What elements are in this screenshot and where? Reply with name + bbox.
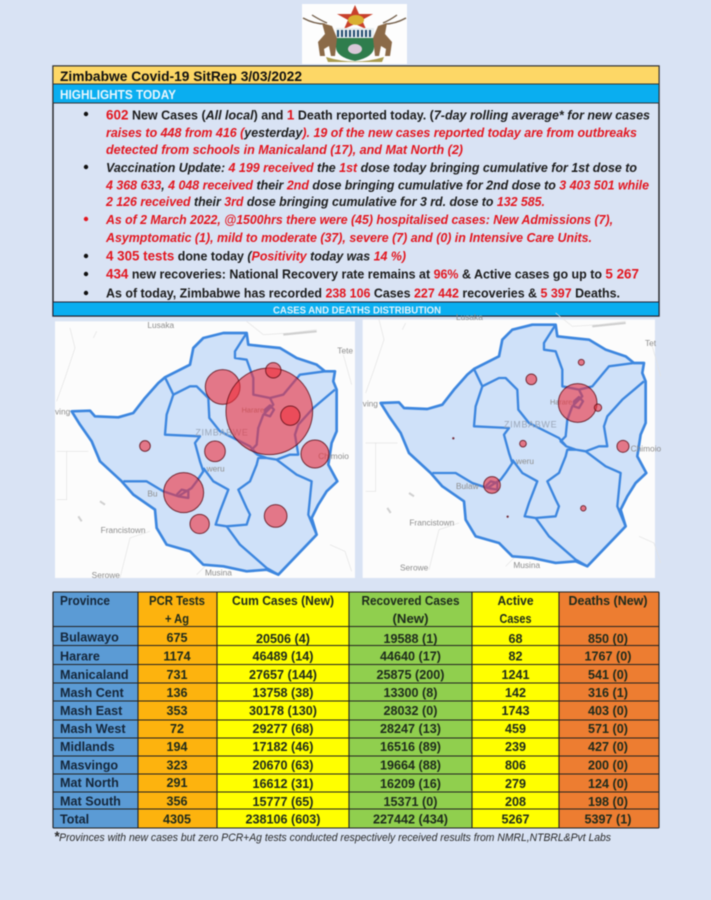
row: Manicaland: 27657 (144) <box>249 668 317 682</box>
bullet list: detected from schools in Manicaland (17), and Mat North (2) <box>106 142 463 157</box>
table header: Province <box>60 594 110 608</box>
case bubbles <box>140 363 329 534</box>
table header: Active <box>498 593 534 608</box>
crest star <box>337 5 373 29</box>
row: Mash West: 72 <box>170 722 184 736</box>
row: Harare: Harare <box>60 650 100 664</box>
row: Mash Cent: 13300 (8) <box>384 686 437 700</box>
icon: Zimbabwe coat of arms <box>302 4 407 64</box>
map place labels: Bulaw <box>456 481 480 491</box>
row: Harare: 1767 (0) <box>585 650 631 664</box>
row: Manicaland: 541 (0) <box>588 668 628 682</box>
map place labels: Serowe <box>400 562 429 572</box>
row: Manicaland: 731 <box>166 668 188 682</box>
bullet list: 602 New Cases (All local) and 1 Death reported today. (7-day rolling average* for new cases <box>106 106 650 122</box>
row: Masvingo: 19664 (88) <box>380 758 441 772</box>
map place labels: weru <box>515 456 534 466</box>
row: Mash Cent: 316 (1) <box>588 686 628 700</box>
title bar <box>53 66 659 84</box>
crest base <box>326 57 384 62</box>
row: Mat South: 198 (0) <box>588 795 628 809</box>
row: Mat North: 279 <box>505 777 526 791</box>
left kudu <box>303 15 337 56</box>
row: Bulawayo: 19588 (1) <box>384 632 437 646</box>
highlights heading bar <box>53 84 659 103</box>
column fills <box>53 592 659 828</box>
row: Midlands: 427 (0) <box>588 740 628 754</box>
row: Total: 5397 (1) <box>585 812 631 826</box>
map place labels: Francistown <box>101 525 146 535</box>
row: Total: 4305 <box>163 812 191 826</box>
row: Manicaland <box>60 668 628 682</box>
row: Mat South: 208 <box>505 795 526 809</box>
row: Mash East: 30178 (130) <box>249 704 317 718</box>
row: Midlands: Midlands <box>60 740 115 754</box>
row: Bulawayo: 850 (0) <box>588 632 628 646</box>
row: Total: 227442 (434) <box>373 812 448 826</box>
map place labels <box>363 312 662 572</box>
map place labels: Serowe <box>92 570 120 580</box>
row: Total: 5267 <box>501 812 530 826</box>
row: Mash West: 28247 (13) <box>380 722 441 736</box>
row: Bulawayo: 68 <box>508 632 523 646</box>
bullet list: 4 368 633, 4 048 received their 2nd dose bringing cumulative for 2nd dose to 3 403 501 while <box>105 178 649 192</box>
row: Total: Total <box>60 812 89 826</box>
table header: Deaths (New) <box>568 593 648 608</box>
bullet list: 2 126 received their 3rd dose bringing cumulative for 3 rd. dose to 132 585. <box>105 194 545 209</box>
row: Midlands: 239 <box>505 740 526 754</box>
map place labels: ZIMBABWE <box>504 419 557 429</box>
row: Mat North <box>60 776 628 791</box>
right kudu <box>373 15 406 56</box>
map place labels: Lusaka <box>147 320 175 330</box>
map place labels: Tete <box>337 346 353 356</box>
map place labels: ZIMBABWE <box>195 427 249 437</box>
highlights heading bar: HIGHLIGHTS TODAY <box>60 87 176 102</box>
row: Harare: 46489 (14) <box>253 650 313 664</box>
row: Mash West <box>60 722 628 736</box>
row: Mat North: 16612 (31) <box>253 777 313 791</box>
map place labels: Musina <box>205 568 232 578</box>
table header: Recovered Cases <box>362 593 460 608</box>
row: Mash East: 1743 <box>501 704 530 718</box>
bullet list: 4 305 tests done today (Positivity today was 14 %) <box>106 248 406 264</box>
row: Mash West: Mash West <box>60 722 126 736</box>
footnote: *Provinces with new cases but zero PCR+Ag tests conducted respectively received results from NMRL,NTBRL&Pvt Labs <box>54 828 611 844</box>
row: Manicaland: Manicaland <box>60 668 129 682</box>
bullet list <box>84 106 650 300</box>
row: Midlands: 17182 (46) <box>253 740 313 754</box>
row: Mash Cent <box>60 686 628 700</box>
row: Total <box>60 812 631 826</box>
map: cumulative cases by province <box>55 320 355 580</box>
row: Mat South: Mat South <box>60 794 121 808</box>
map place labels: Chimoio <box>631 443 662 453</box>
row: Mat North: 291 <box>166 776 188 790</box>
row: Bulawayo: 675 <box>166 631 188 645</box>
bullet list: Vaccination Update: 4 199 received the 1st dose today bringing cumulative for 1st dose to <box>106 160 637 175</box>
row: Mat South: 356 <box>166 794 188 808</box>
map place labels: Harare <box>242 405 264 414</box>
map place labels: Tet <box>645 338 657 348</box>
map: deaths by province <box>363 312 662 578</box>
section bar: cases and deaths distribution: CASES AND DEATHS DISTRIBUTION <box>273 304 441 316</box>
row: Mat North: 124 (0) <box>588 777 628 791</box>
row: Mash Cent: 142 <box>505 686 526 700</box>
row: Masvingo: 806 <box>505 758 526 772</box>
row: Bulawayo: 20506 (4) <box>256 632 310 646</box>
row: Mat North: Mat North <box>60 776 119 790</box>
row: Manicaland: 25875 (200) <box>377 668 444 682</box>
shield <box>336 28 374 61</box>
row: Mash East <box>60 704 628 718</box>
map place labels <box>55 320 353 580</box>
row: Mash West: 29277 (68) <box>253 722 313 736</box>
row: Mat North: 16209 (16) <box>380 777 441 791</box>
bullet list: As of today, Zimbabwe has recorded 238 106 Cases 227 442 recoveries & 5 397 Deaths. <box>106 286 620 300</box>
row: Mash Cent: Mash Cent <box>60 686 124 700</box>
row: Mat South: 15371 (0) <box>384 795 437 809</box>
row: Total: 238106 (603) <box>246 812 320 826</box>
map place labels: ving <box>55 407 71 417</box>
map place labels: ving <box>363 399 378 409</box>
table: provincial statistics <box>53 592 659 828</box>
row: Mat South <box>60 794 628 809</box>
row: Masvingo: 20670 (63) <box>253 758 313 772</box>
table header: + Ag <box>165 611 189 626</box>
row: Mash East: Mash East <box>60 704 123 718</box>
section bar: cases and deaths distribution <box>53 302 659 316</box>
map place labels: Harare <box>550 398 572 407</box>
table header: (New) <box>392 611 428 626</box>
row: Harare <box>60 650 631 664</box>
row: Mash Cent: 136 <box>166 686 188 700</box>
row: Mash East: 28032 (0) <box>384 704 437 718</box>
map place labels: Francistown <box>409 517 455 527</box>
panel: highlights <box>53 66 659 316</box>
map place labels: Bu <box>147 489 158 499</box>
row: Mash East: 403 (0) <box>588 704 628 718</box>
row: Manicaland: 1241 <box>501 668 530 682</box>
row: Mash West: 459 <box>505 722 526 736</box>
table header <box>60 593 648 626</box>
row: Mash East: 353 <box>166 704 188 718</box>
bullet list: 434 new recoveries: National Recovery rate remains at 96% & Active cases go up to 5 267 <box>106 266 639 282</box>
bullet list: As of 2 March 2022, @1500hrs there were (45) hospitalised cases: New Admissions (7), <box>105 212 613 227</box>
death bubbles <box>453 359 629 517</box>
row: Midlands: 16516 (89) <box>380 740 441 754</box>
row: Masvingo: 200 (0) <box>588 758 628 772</box>
row: Harare: 44640 (17) <box>380 650 441 664</box>
map place labels: weru <box>206 464 225 474</box>
row: Harare: 1174 <box>163 650 191 664</box>
row: Masvingo: Masvingo <box>60 758 118 772</box>
row: Midlands: 194 <box>166 740 188 754</box>
map place labels: Musina <box>513 560 541 570</box>
row: Masvingo <box>60 758 628 772</box>
row: Mat South: 15777 (65) <box>253 795 313 809</box>
table header: Cum Cases (New) <box>232 593 334 608</box>
map place labels: Lusaka <box>456 312 483 322</box>
table header: Cases <box>500 611 532 626</box>
table header: PCR Tests <box>149 593 205 608</box>
title bar: Zimbabwe Covid-19 SitRep 3/03/2022 <box>60 68 302 84</box>
row: Masvingo: 323 <box>166 758 188 772</box>
row: Bulawayo <box>60 630 628 646</box>
row: Midlands <box>60 740 628 754</box>
bullet list: Asymptomatic (1), mild to moderate (37), severe (7) and (0) in Intensive Care Units. <box>105 230 592 245</box>
row: Harare: 82 <box>508 650 523 664</box>
row: Bulawayo: Bulawayo <box>60 630 119 644</box>
map place labels: Chimoio <box>318 451 349 461</box>
bullet list: raises to 448 from 416 (yesterday). 19 of the new cases reported today are from outbreaks <box>106 125 637 140</box>
row: Mash West: 571 (0) <box>588 722 628 736</box>
row: Mash Cent: 13758 (38) <box>253 686 313 700</box>
